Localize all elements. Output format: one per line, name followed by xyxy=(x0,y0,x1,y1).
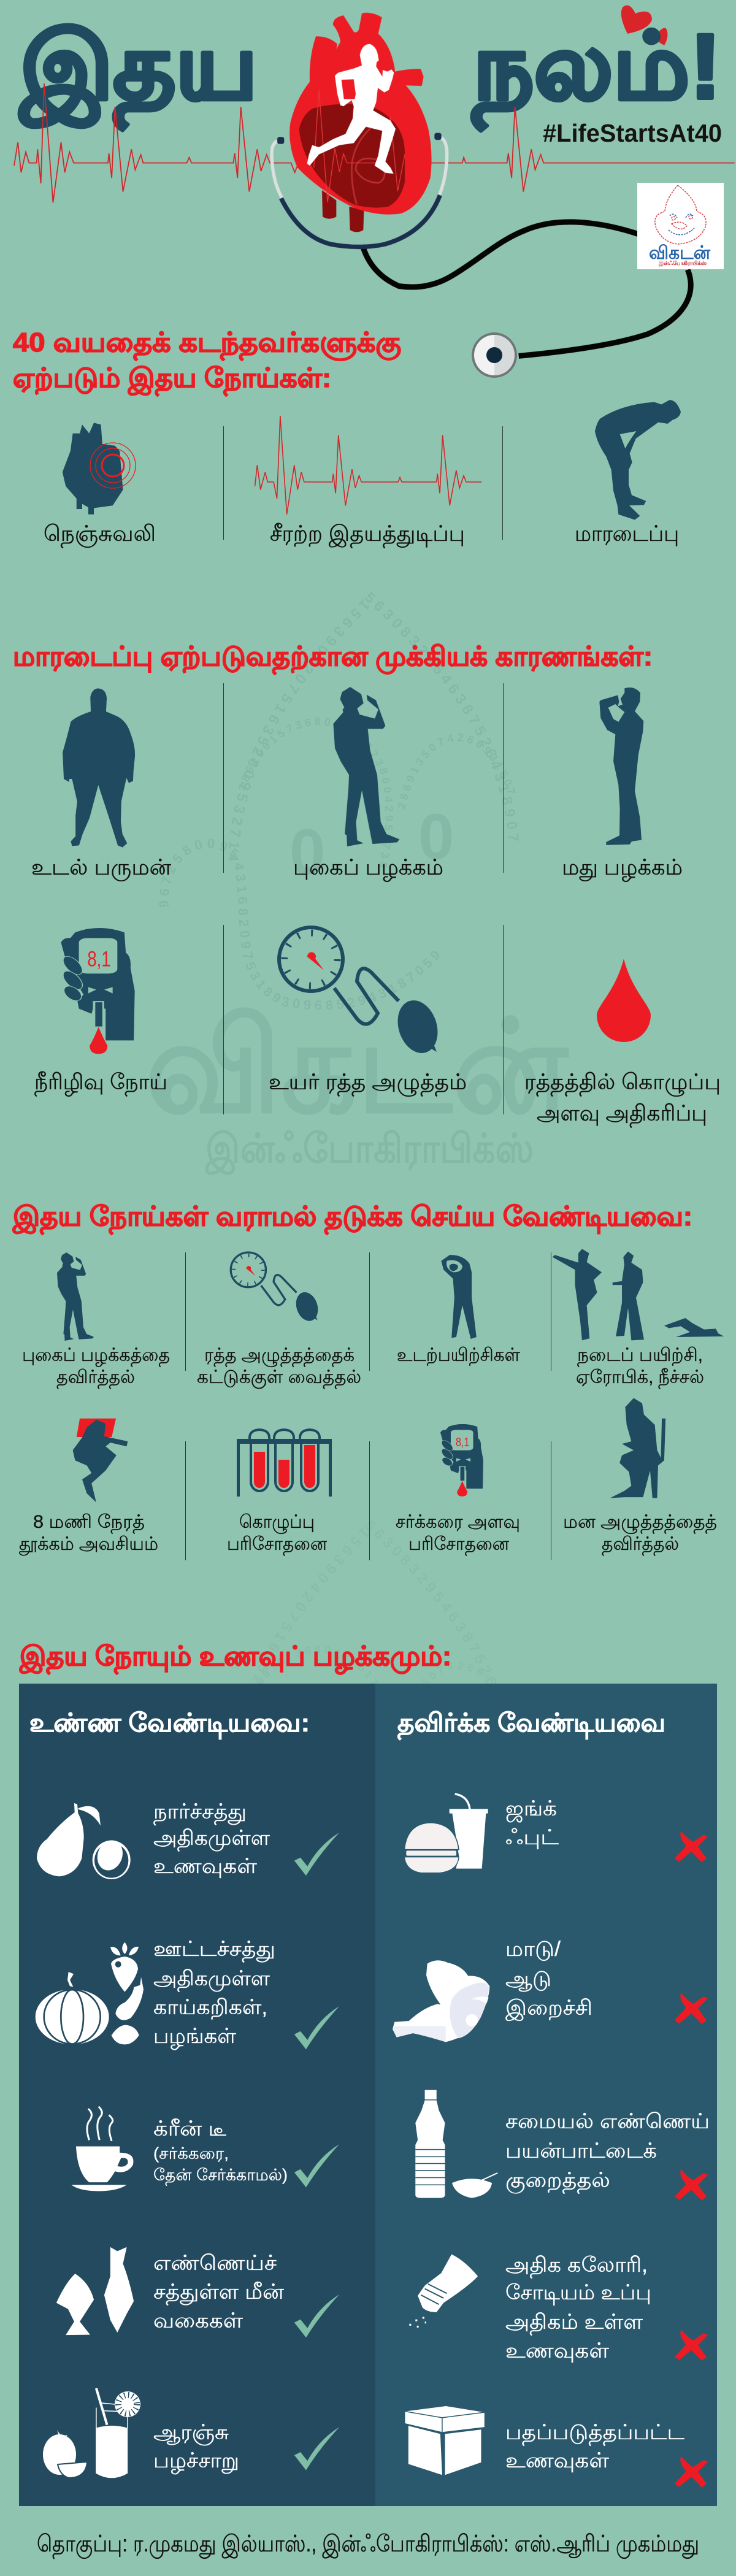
icon: avocado xyxy=(37,1803,131,1879)
icons: cross marks xyxy=(675,1831,708,2488)
label: அதிகமுள்ள xyxy=(153,1967,270,1992)
label: நடைப் பயிற்சி, xyxy=(577,1345,703,1367)
label: பயன்பாட்டைக் xyxy=(505,2139,657,2163)
stethoscope ear tubes xyxy=(272,136,447,198)
header: hearts xyxy=(621,6,667,45)
label: சத்துள்ள மீன் xyxy=(153,2280,284,2306)
label: பழச்சாறு xyxy=(153,2449,239,2474)
label: நெஞ்சுவலி xyxy=(44,521,156,548)
label: அதிக கலோரி, xyxy=(505,2253,648,2279)
icon: vegetables xyxy=(36,1942,144,2044)
icon: gauge small xyxy=(231,1252,321,1324)
label: பழங்கள் xyxy=(153,2025,236,2050)
label xyxy=(505,1938,592,2021)
label: மன அழுத்தத்தைத் xyxy=(563,1512,717,1534)
label: தவிர்த்தல் xyxy=(56,1367,135,1389)
panel: prevention xyxy=(19,1249,724,1556)
panel: causes of heart attack xyxy=(31,687,721,1128)
label: ஃபுட் xyxy=(505,1826,559,1849)
label: உடற்பயிற்சிகள் xyxy=(397,1345,520,1366)
heart inner ECG xyxy=(314,90,405,202)
label: பரிசோதனை xyxy=(408,1534,509,1556)
label xyxy=(505,2253,651,2363)
logo: vikatan xyxy=(637,183,724,269)
label: குறைத்தல் xyxy=(505,2169,610,2194)
watermark: vikatan infographics: இன்ஃபோகிராபிக்ஸ் xyxy=(205,1125,534,1176)
section 1 heading: 40 வயதைக் கடந்தவர்களுக்கு xyxy=(13,328,401,361)
label xyxy=(505,2110,710,2194)
heart inner curves xyxy=(351,127,385,204)
label: புகைப் பழக்கம் xyxy=(293,854,443,882)
icon: blood drop xyxy=(597,959,651,1042)
label: பரிசோதனை xyxy=(227,1534,327,1556)
section 1 heading xyxy=(13,328,401,397)
label: உணவுகள் xyxy=(153,1855,257,1878)
icon: salt shaker xyxy=(409,2255,478,2328)
icon: smoker xyxy=(333,687,399,846)
label xyxy=(524,1069,721,1128)
label: தூக்கம் அவசியம் xyxy=(19,1534,158,1555)
label xyxy=(153,1938,275,2050)
label xyxy=(505,2421,684,2472)
label xyxy=(153,1800,270,1878)
label: கட்டுக்குள் வைத்தல் xyxy=(197,1367,361,1389)
stethoscope ear tips xyxy=(277,133,442,144)
label: சர்க்கரை அளவு xyxy=(396,1512,520,1532)
icon: burger and drink xyxy=(404,1794,488,1873)
heart xyxy=(289,13,432,215)
label: ரத்த அழுத்தத்தைக் xyxy=(204,1345,355,1367)
icon: smoker small xyxy=(57,1252,94,1341)
section 2 heading: மாரடைப்பு ஏற்படுவதற்கான முக்கியக் காரணங்கள்: xyxy=(13,642,653,675)
icon: oil bottle and bowl xyxy=(415,2090,497,2198)
logo face xyxy=(655,185,706,244)
label: உணவுகள் xyxy=(505,2339,609,2363)
label: 8 மணி நேரத் xyxy=(33,1512,145,1534)
label xyxy=(563,1512,717,1556)
label: ஊட்டச்சத்து xyxy=(153,1938,275,1963)
label: ஏரோபிக், நீச்சல் xyxy=(576,1367,704,1389)
label: ஆடு xyxy=(505,1968,551,1992)
label xyxy=(19,1512,158,1555)
heart chamber xyxy=(299,104,405,208)
icons: check marks xyxy=(294,1833,339,2471)
column heading: தவிர்க்க வேண்டியவை xyxy=(397,1708,665,1741)
icon: tea cup xyxy=(71,2107,133,2191)
label xyxy=(153,2421,239,2474)
panel: heart disease symptoms xyxy=(44,400,681,548)
label: அளவு அதிகரிப்பு xyxy=(537,1100,707,1128)
label: மது பழக்கம் xyxy=(562,854,683,882)
label: க்ரீன் டீ xyxy=(153,2117,226,2141)
panel: foods to avoid xyxy=(375,1684,717,2506)
watermark: vikatan infographics xyxy=(0,0,569,1941)
hashtag: #LifeStartsAt40 xyxy=(543,119,722,147)
icon: stressed woman on chair xyxy=(610,1398,665,1498)
icon: walking, aerobics and swimming xyxy=(553,1249,724,1340)
label: இறைச்சி xyxy=(505,1996,592,2021)
label: பதப்படுத்தப்பட்ட xyxy=(505,2421,684,2446)
label: தேன் சேர்க்காமல்) xyxy=(153,2166,288,2186)
icon: drinker xyxy=(599,688,643,845)
icon: orange juice xyxy=(43,2388,140,2478)
ECG line: header xyxy=(14,83,735,202)
label xyxy=(396,1512,520,1556)
icon: heart with pain rings xyxy=(63,423,136,515)
label: (சர்க்கரை, xyxy=(153,2144,229,2163)
section 3 heading: இதய நோய்கள் வராமல் தடுக்க செய்ய வேண்டியவை: xyxy=(12,1202,692,1235)
panel: foods to eat xyxy=(19,1684,375,2506)
chart: irregular heartbeat ECG xyxy=(255,416,481,515)
label: ரத்தத்தில் கொழுப்பு xyxy=(524,1069,721,1097)
icon: test tubes xyxy=(237,1430,332,1497)
label: அதிகம் உள்ள xyxy=(505,2310,643,2336)
label: உடல் பருமன் xyxy=(31,854,171,881)
label: மாரடைப்பு xyxy=(575,521,679,546)
section 4 heading: இதய நோயும் உணவுப் பழக்கமும்: xyxy=(19,1641,451,1675)
stethoscope arc xyxy=(281,195,440,247)
icon: obese person xyxy=(63,688,135,848)
stethoscope tube xyxy=(362,222,691,356)
label: கொழுப்பு xyxy=(239,1512,315,1534)
icon: glucose meter xyxy=(59,928,135,1054)
icon: blood pressure gauge xyxy=(279,927,444,1058)
label xyxy=(153,2117,288,2186)
title: right word: நலம்! xyxy=(472,15,721,131)
label xyxy=(505,1797,559,1849)
label xyxy=(227,1512,327,1556)
label: ஆரஞ்சு xyxy=(153,2421,229,2445)
label: மாடு/ xyxy=(505,1938,561,1961)
label: காய்கறிகள், xyxy=(153,1996,267,2020)
stethoscope chest piece xyxy=(472,332,517,378)
icon: glucose meter small xyxy=(439,1424,483,1497)
label: புகைப் பழக்கத்தை xyxy=(22,1345,170,1367)
icon: stretching person xyxy=(441,1255,477,1339)
label: உணவுகள் xyxy=(505,2449,609,2472)
column heading: உண்ண வேண்டியவை: xyxy=(29,1708,310,1739)
heart vessels xyxy=(322,190,364,232)
label xyxy=(22,1345,170,1389)
stethoscope and heart illustration xyxy=(272,13,447,247)
icon: man bent over xyxy=(595,400,681,519)
label: சீரற்ற இதயத்துடிப்பு xyxy=(270,521,465,548)
label: அதிகமுள்ள xyxy=(153,1827,270,1852)
icon: meat xyxy=(393,1960,489,2042)
label: சமையல் எண்ணெய் xyxy=(505,2110,710,2133)
label xyxy=(197,1345,361,1389)
label: நீரிழிவு நோய் xyxy=(34,1069,167,1097)
icon: sleeping person xyxy=(73,1419,128,1502)
runner xyxy=(307,44,396,174)
icon: packaged box xyxy=(405,2406,485,2475)
label: நார்ச்சத்து xyxy=(153,1800,247,1825)
icon: fish xyxy=(56,2247,134,2335)
label: வகைகள் xyxy=(153,2309,243,2333)
label: எண்ணெய்ச் xyxy=(153,2252,277,2275)
label xyxy=(153,2252,284,2333)
section 1 heading: ஏற்படும் இதய நோய்கள்: xyxy=(13,363,331,397)
logo name: விகடன் xyxy=(649,243,711,263)
label: உயர் ரத்த அழுத்தம் xyxy=(269,1069,467,1097)
logo subtitle: இன்ஃபோகிராபிக்ஸ் xyxy=(658,260,707,267)
title: left word: இதய xyxy=(19,15,258,131)
label: ஜங்க் xyxy=(505,1797,557,1822)
watermark: vikatan infographics: விகடன் xyxy=(145,995,569,1139)
label: தவிர்த்தல் xyxy=(602,1534,679,1556)
label xyxy=(576,1345,704,1389)
label: சோடியம் உப்பு xyxy=(505,2281,651,2306)
